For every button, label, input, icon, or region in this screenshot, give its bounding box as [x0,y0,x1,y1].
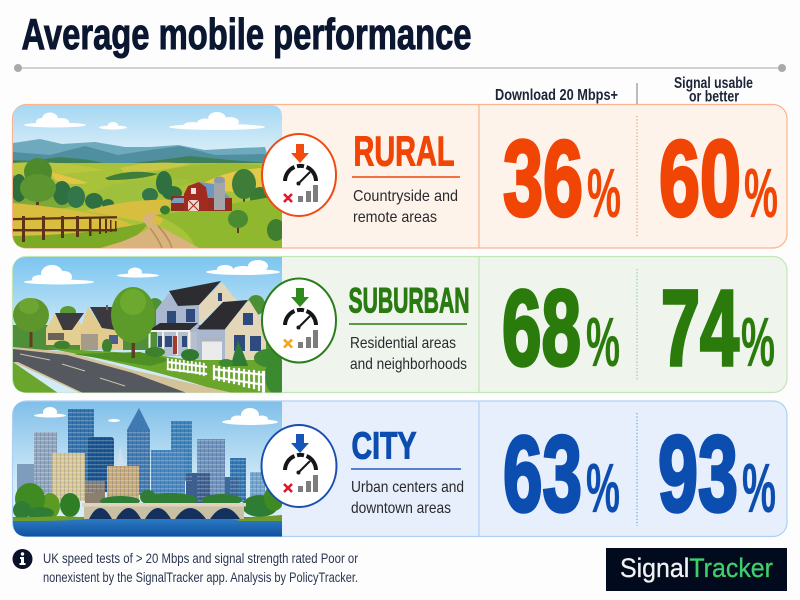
city download value: % [586,449,620,527]
footnote [43,551,358,585]
rural signal value: 60 [659,118,741,238]
title rule [14,64,786,72]
tan house [80,305,123,350]
icon: gauge [285,166,316,186]
icon: cross [284,194,292,202]
column header: download: Download 20 Mbps+ [495,87,618,104]
rural column divider [478,105,480,248]
icon: cross [284,484,292,492]
large house [148,281,266,362]
rural label: RURAL [354,128,454,174]
small house [46,313,84,345]
skyline [17,405,267,505]
bridge [82,503,246,519]
footnote: nonexistent by the SignalTracker app. Analysis by PolicyTracker. [43,570,358,585]
rural download value: 36 [503,118,583,238]
icon: info [12,549,32,569]
city dotted divider [636,413,638,526]
icon: city speed and signal [262,425,336,507]
city signal value: 93 [658,413,738,534]
icon: cross [284,340,292,348]
rural download value: % [587,154,621,232]
city illustration [13,401,284,537]
suburban download value: 68 [502,267,581,388]
column header divider [636,83,638,104]
rural description: Countryside and [353,188,458,205]
icon: signal bars [298,475,318,492]
suburban panel background [12,256,787,392]
suburban download value: % [586,303,620,381]
icon: signal bars [298,330,318,348]
city description: downtown areas [351,500,451,517]
middle tree [111,287,155,358]
foreground hills [85,200,175,225]
fence [167,358,265,393]
city description [351,479,464,517]
rural panel background [12,104,787,248]
icon: gauge [285,455,316,474]
lawn [47,348,285,393]
water [13,517,282,537]
title: Average mobile performance [22,10,472,59]
barn [170,176,232,211]
panel: suburban [12,256,787,394]
fence [13,216,117,242]
trees left [11,158,182,209]
icon: arrow [291,434,309,453]
icon: signal bars [298,185,318,202]
suburban signal value: 74 [661,267,739,388]
suburban label: SUBURBAN [348,282,470,320]
city column divider [478,402,480,536]
left tree [13,298,49,347]
road [13,347,233,393]
icon: rural speed and signal [262,134,336,216]
city label: CITY [352,426,416,468]
column header: signal: Signal usable [674,75,753,92]
city download value: 63 [503,413,582,534]
icon: arrow [291,144,309,163]
suburban dotted divider [636,269,638,381]
suburban illustration [13,257,287,394]
footnote: UK speed tests of > 20 Mbps and signal strength rated Poor or [43,551,358,566]
suburban column divider [478,257,480,392]
rural description: remote areas [353,209,437,226]
suburban description [350,335,467,373]
rural description [353,188,458,226]
column header: signal: or better [689,88,739,106]
panel: rural [11,104,787,248]
icon: gauge [285,310,316,330]
city description: Urban centers and [351,479,464,496]
icon: arrow [291,288,309,307]
rural underline [352,176,460,178]
suburban description: Residential areas [350,335,456,352]
column header: signal [674,75,753,106]
panel: city [12,401,787,537]
trees right [232,169,267,202]
road [103,213,199,248]
city underline [351,468,461,470]
city panel background [12,401,787,536]
suburban description: and neighborhoods [350,356,467,373]
suburban underline [349,323,467,325]
icon: suburban speed and signal [262,278,336,362]
logo: SignalTracker: SignalTracker [620,553,773,583]
rural dotted divider [636,116,638,237]
trees along bank [13,483,284,519]
logo: SignalTracker [606,548,787,591]
rural illustration [11,105,285,248]
